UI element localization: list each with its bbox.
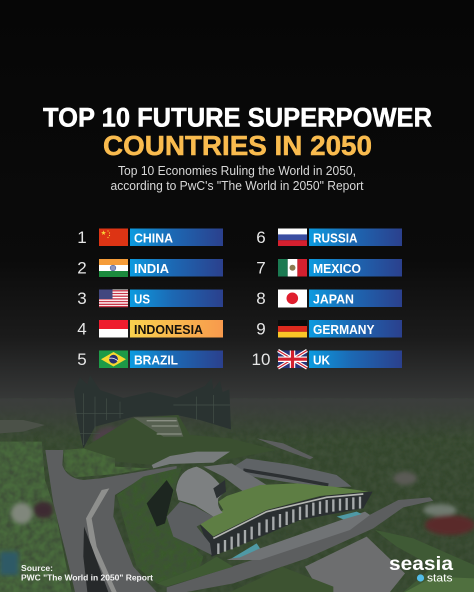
row 1 China: ★ [101,229,107,237]
subtitle [110,164,364,193]
pavilion roof [152,452,230,468]
forest haze [0,398,474,440]
row 9 Germany [256,320,402,338]
garden shadow [147,480,173,527]
row 10 UK [252,350,402,369]
row 2 India: INDIA [134,262,169,276]
source note: PWC "The World in 2050" Report [21,572,153,582]
row 6 Russia: 6 [256,228,266,247]
left pavilion [0,420,45,433]
row 5 Brazil: 5 [77,350,87,369]
lawn [157,557,233,587]
rear wing [233,458,352,487]
road median [86,488,117,592]
row 4 Indonesia: 4 [77,320,87,338]
forecourt [203,463,267,492]
row 10 UK: UK [313,354,330,368]
row 4 Indonesia [77,320,223,338]
row 1 China: 1 [77,228,87,247]
aerial scene of government complex [0,375,474,592]
row 10 UK: 10 [252,350,270,369]
roads [45,438,433,592]
left garden [0,442,72,592]
ranking: right column [252,228,402,369]
row 8 Japan: 8 [256,289,266,308]
source note [21,563,153,582]
right lawns [375,530,474,592]
row 1 China [77,228,223,247]
road shadow [83,527,108,592]
row 8 Japan [256,289,402,308]
row 7 Mexico: 7 [256,258,266,278]
row 1 China: CHINA [134,232,173,246]
row 6 Russia: RUSSIA [313,232,358,246]
palace steps [133,417,183,437]
row 2 India [77,258,223,278]
row 7 Mexico: MEXICO [313,262,361,276]
flower clusters [0,427,474,575]
row 3 US: US [134,292,150,306]
domed hall [167,467,226,555]
plaza paving [227,512,370,560]
row 7 Mexico [256,258,402,278]
secondary garden [63,448,150,477]
row 3 US [77,289,223,308]
ranking: left column [77,228,223,369]
row 9 Germany: 9 [256,320,266,338]
lower shrubs [230,567,333,592]
row 9 Germany: GERMANY [313,323,375,337]
subtitle: according to PwC's "The World in 2050" Report [110,179,364,193]
row 5 Brazil: BRAZIL [134,354,178,368]
terraced hill [80,415,277,465]
title: COUNTRIES IN 2050 [103,130,372,161]
subtitle: Top 10 Economies Ruling the World in 2050, [118,164,356,178]
forest background [0,398,474,592]
row 6 Russia [256,228,402,247]
row 3 US: 3 [77,289,87,308]
row 2 India: 2 [77,258,87,278]
green roof [200,483,368,537]
main building colonnade [200,492,373,557]
central garden [117,467,203,583]
title [43,102,432,161]
source note: Source: [21,563,53,573]
logo: seasia stats [389,554,453,584]
logo: seasia stats: stats [427,572,453,584]
parking plaza [305,537,405,592]
title: TOP 10 FUTURE SUPERPOWER [43,102,432,132]
logo: seasia stats: seasia [389,554,453,575]
fountains [232,512,362,558]
row 5 Brazil [77,350,223,369]
row 8 Japan: JAPAN [313,292,354,306]
palace [74,375,231,448]
row 4 Indonesia: INDONESIA [134,323,203,337]
